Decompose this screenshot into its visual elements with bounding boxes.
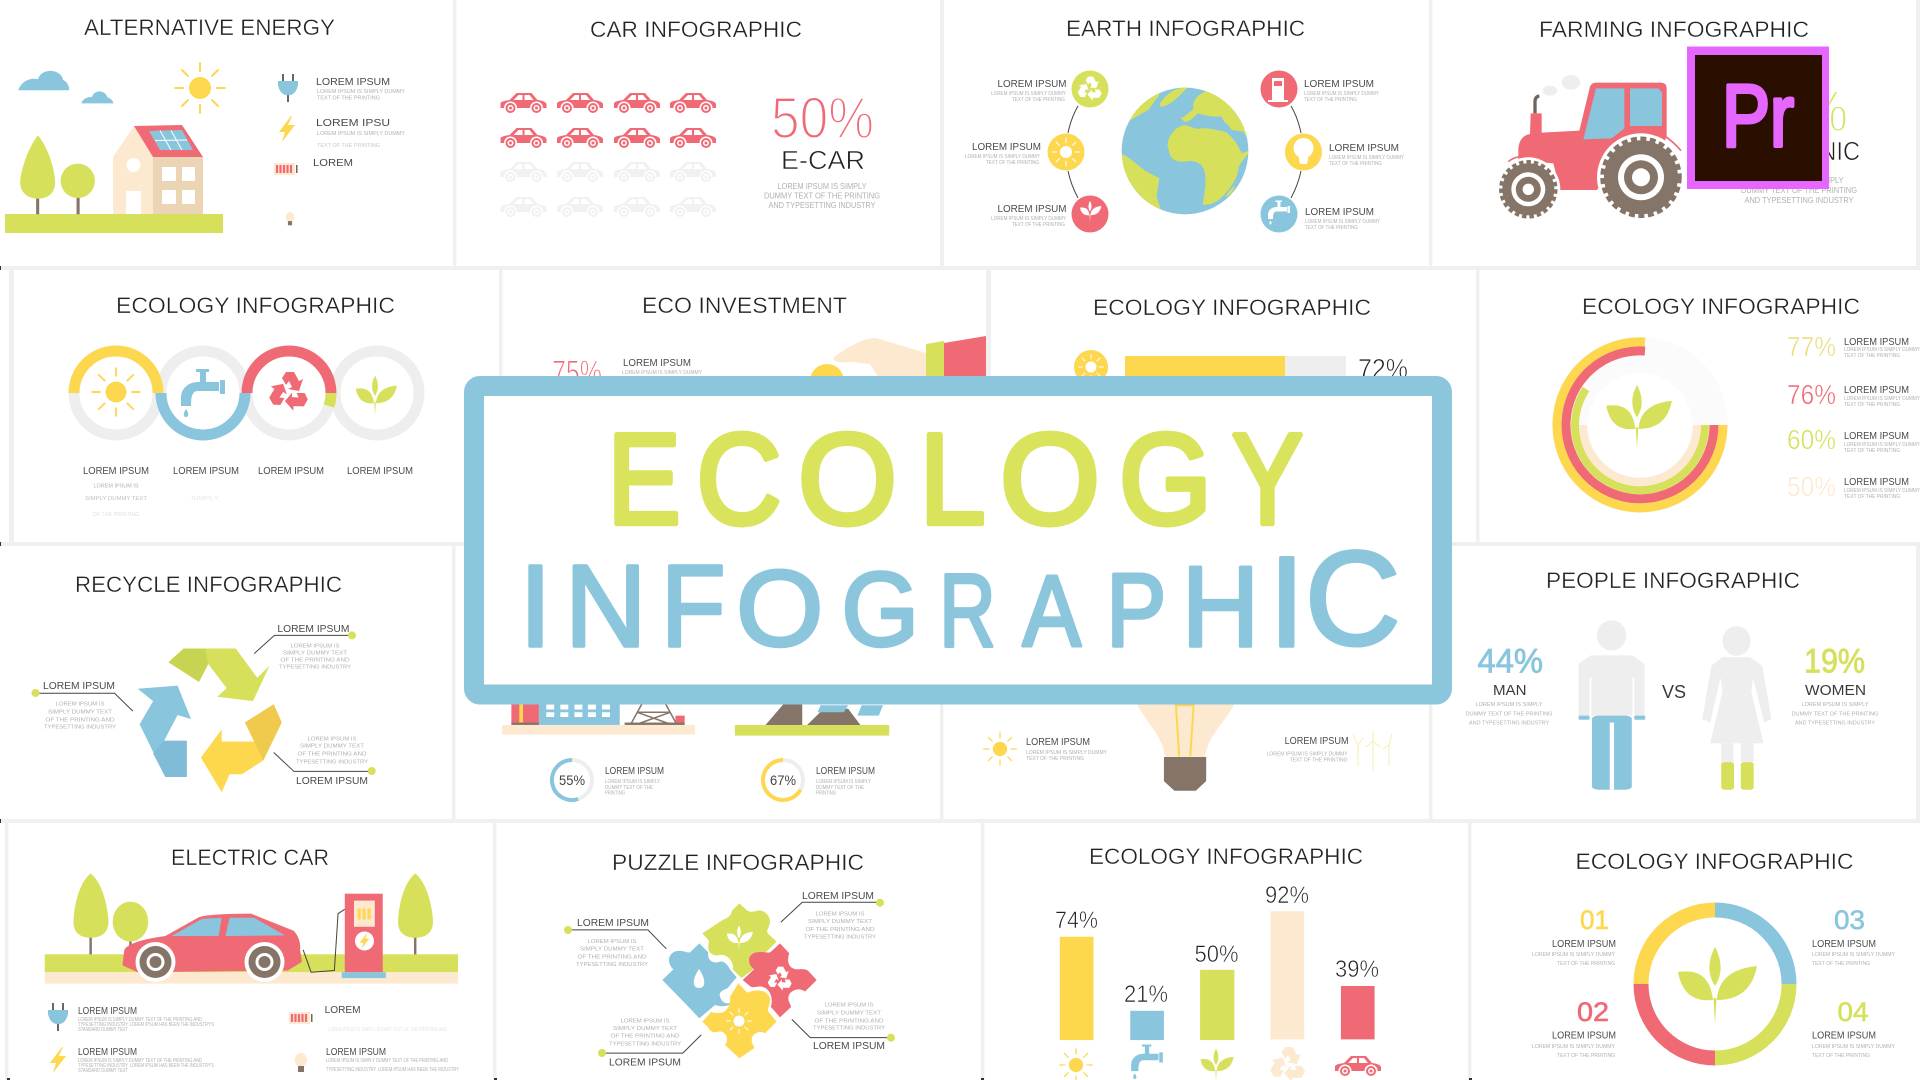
panel: earth infographic — [965, 16, 1404, 232]
callout dots — [564, 899, 895, 1057]
title word: ecology: O — [798, 408, 897, 552]
legend text: LOREM IPSUM IS SIMPLY DUMMY TEXT OF THE PRINTING AND — [78, 1058, 202, 1064]
callout text: OF THE PRINTING AND — [280, 658, 350, 664]
card frame — [474, 386, 1442, 694]
bar values: 50% — [1194, 941, 1238, 968]
text blocks: LOREM IPSUM IS SIMPLY DUMMY — [317, 131, 405, 137]
text: right note: LOREM IPSUM IS SIMPLY DUMMY — [1267, 752, 1348, 758]
stat: women — [1792, 643, 1878, 726]
title: ecology infographic: ECOLOGY INFOGRAPHIC — [116, 293, 395, 318]
legend text: LOREM IPSUM IS SIMPLY DUMMY TEXT OF THE PRINTING AND — [326, 1058, 448, 1064]
text blocks: TEXT OF THE PRINTING — [1304, 97, 1357, 103]
mountain and solar scene — [735, 704, 889, 736]
callout text: SIMPLY DUMMY TEXT — [283, 650, 348, 656]
stat: 50% e-car: LOREM IPSUM IS SIMPLY — [778, 182, 867, 191]
bar values: 92% — [1265, 882, 1309, 909]
callout text: LOREM IPSUM — [813, 1041, 885, 1052]
text: left note: LOREM IPSUM IS SIMPLY DUMMY — [1026, 750, 1107, 756]
callout text: LOREM IPSUM IS — [308, 736, 357, 742]
title word: ecology: G — [1119, 408, 1212, 552]
callout text — [576, 891, 885, 1068]
panel: recycle infographic — [32, 572, 376, 792]
icon: clouds — [18, 71, 113, 103]
legend icons — [48, 1003, 312, 1073]
panel: ecology bar top — [1074, 295, 1408, 384]
badge: premiere pro — [1687, 46, 1829, 189]
item 03: LOREM IPSUM IS SIMPLY DUMMY — [1812, 952, 1895, 958]
ring labels: LOREM IPSUM — [83, 466, 149, 477]
list labels: TEXT OF THE PRINTING — [1844, 448, 1900, 454]
stat: man: DUMMY TEXT OF THE PRINTING — [1466, 712, 1552, 718]
stat: women: 19% — [1804, 643, 1865, 681]
callout text: LOREM IPSUM IS — [56, 702, 105, 708]
title: ecology infographic: ECOLOGY INFOGRAPHIC — [1582, 294, 1860, 319]
title: ecology infographic: ECOLOGY INFOGRAPHIC — [1576, 849, 1854, 874]
ring labels — [83, 466, 413, 518]
item 02: TEXT OF THE PRINTING — [1557, 1053, 1615, 1059]
text blocks: TEXT OF THE PRINTING — [986, 160, 1039, 166]
list labels: LOREM IPSUM — [1844, 431, 1909, 442]
callout text — [43, 624, 368, 787]
callout text: SIMPLY DUMMY TEXT — [48, 710, 113, 716]
item 04: 04 — [1838, 997, 1868, 1027]
tractor — [1496, 75, 1685, 221]
legend text: LOREM IPSUM — [326, 1047, 386, 1058]
stat: 75%: 75% — [552, 354, 602, 392]
title: ecology infographic: ECOLOGY INFOGRAPHIC — [1089, 844, 1363, 869]
title word: infographic: N — [565, 541, 646, 671]
ring labels: SIMPLY DUMMY TEXT — [85, 496, 148, 502]
title word: infographic: O — [736, 548, 823, 668]
stat: man — [1466, 643, 1552, 726]
callout text: LOREM IPSUM — [277, 624, 349, 635]
hand with coin — [810, 336, 986, 398]
title word: infographic: A — [1022, 556, 1082, 668]
stat: 50% e-car: DUMMY TEXT OF THE PRINTING — [764, 192, 880, 200]
callout text: TYPESETTING INDUSTRY — [279, 664, 351, 670]
ring labels: LOREM IPSUM — [173, 466, 239, 477]
callout text: TYPESETTING INDUSTRY — [296, 760, 368, 766]
title: earth infographic: EARTH INFOGRAPHIC — [1066, 16, 1305, 41]
title word: infographic: F — [661, 541, 726, 671]
stat: 50% e-car: 50% — [771, 86, 874, 151]
stat label — [622, 358, 702, 376]
item 01: TEXT OF THE PRINTING — [1557, 961, 1615, 967]
list labels: TEXT OF THE PRINTING — [1844, 494, 1900, 500]
text blocks: LOREM IPSUM IS SIMPLY DUMMY — [1305, 219, 1380, 225]
radial progress chart — [1557, 342, 1723, 508]
bar values — [1055, 882, 1379, 1008]
ring labels: LOREM IPSUM — [347, 466, 413, 477]
legend text: LOREM IPSUM IS SIMPLY DUMMY TEXT OF THE PRINTING AND — [328, 1027, 447, 1033]
item 02: 02 — [1577, 997, 1609, 1027]
house with solar roof — [113, 125, 203, 214]
bar values: 39% — [1335, 956, 1379, 983]
title: electric car: ELECTRIC CAR — [171, 845, 329, 870]
stat: women: LOREM IPSUM IS SIMPLY — [1802, 702, 1869, 708]
icon: sun — [984, 733, 1016, 765]
callout text: LOREM IPSUM IS — [620, 1018, 670, 1024]
item 04 — [1812, 997, 1895, 1059]
text blocks: LOREM IPSUM IS SIMPLY DUMMY — [317, 89, 405, 95]
ring labels: OF THE PRINTING — [92, 512, 140, 518]
text blocks: TEXT OF THE PRINTING — [1012, 97, 1065, 103]
hidden stat behind the badge: LOREM IPSUM IS SIMPLY — [1754, 176, 1844, 185]
callout dots — [32, 631, 376, 775]
percent list: 50% — [1787, 471, 1836, 502]
item 03: TEXT OF THE PRINTING — [1812, 961, 1870, 967]
gauge: 55%: LOREM IPSUM — [605, 766, 664, 777]
title: car infographic: CAR INFOGRAPHIC — [590, 17, 802, 42]
badge: premiere pro: Pr — [1722, 66, 1794, 165]
title word: infographic: I — [519, 541, 552, 671]
callout leader lines — [568, 902, 891, 1053]
item 02: LOREM IPSUM — [1552, 1030, 1616, 1042]
item 04: TEXT OF THE PRINTING — [1812, 1053, 1870, 1059]
stat: 50% e-car: E-CAR — [781, 145, 865, 175]
callout text: OF THE PRINTING AND — [298, 752, 367, 758]
text blocks: LOREM IPSUM — [1305, 207, 1374, 218]
title word: ecology: Y — [1232, 408, 1303, 552]
callout text: SIMPLY DUMMY TEXT — [580, 946, 645, 952]
panel: people infographic — [1466, 568, 1878, 790]
bar icons — [1060, 1044, 1381, 1080]
icon: sun — [175, 63, 225, 113]
hidden stat behind the badge: AND TYPESETTING INDUSTRY — [1744, 196, 1854, 205]
item 01 — [1532, 905, 1616, 967]
ring icons — [92, 368, 397, 417]
callout text: OF THE PRINTING AND — [610, 1034, 680, 1040]
callout text: LOREM IPSUM IS — [824, 1002, 874, 1008]
text blocks: TEXT OF THE PRINTING — [317, 143, 380, 149]
gauge: 67%: LOREM IPSUM — [816, 766, 875, 777]
stat: man: AND TYPESETTING INDUSTRY — [1469, 720, 1549, 726]
gauge: 67% — [763, 760, 875, 800]
text blocks: TEXT OF THE PRINTING — [1329, 161, 1382, 167]
puzzle pieces — [662, 903, 817, 1058]
gauge: 67%: DUMMY TEXT OF THE — [816, 785, 864, 791]
legend text: LOREM IPSUM — [78, 1006, 137, 1017]
recycle arrows — [138, 648, 282, 792]
legend text: LOREM IPSUM IS SIMPLY DUMMY TEXT OF THE PRINTING AND — [78, 1017, 202, 1023]
text: left note — [1026, 737, 1107, 762]
stat: man: 44% — [1478, 643, 1543, 681]
callout text: SIMPLY DUMMY TEXT — [808, 919, 873, 925]
text blocks: TEXT OF THE PRINTING — [317, 96, 380, 102]
pump dial — [355, 932, 374, 950]
icon: leaf — [1678, 947, 1757, 1024]
percent list: 76% — [1787, 379, 1836, 410]
linked progress rings — [74, 351, 419, 435]
item 02: LOREM IPSUM IS SIMPLY DUMMY — [1532, 1044, 1615, 1050]
legend text: LOREM IPSUM — [78, 1047, 137, 1058]
factory scene — [502, 702, 695, 735]
legend text: STANDARD DUMMY TEXT — [78, 1027, 128, 1033]
stat label: LOREM IPSUM IS SIMPLY DUMMY — [622, 370, 702, 376]
percent list — [1787, 331, 1836, 502]
stat: women: DUMMY TEXT OF THE PRINTING — [1792, 712, 1878, 718]
panel: light bulb — [984, 700, 1392, 791]
text blocks: LOREM IPSUM — [998, 204, 1066, 215]
item 01: 01 — [1580, 905, 1609, 935]
callout text: TYPESETTING INDUSTRY — [609, 1042, 681, 1048]
text blocks: TEXT OF THE PRINTING — [1012, 222, 1065, 228]
gauge: 67%: 67% — [770, 772, 796, 788]
text blocks: LOREM IPSUM IS SIMPLY DUMMY — [965, 154, 1040, 160]
edge ticks — [0, 266, 1472, 1080]
hidden stat behind the badge: DUMMY TEXT OF THE PRINTING — [1741, 186, 1857, 195]
panel: ecology rings — [1557, 294, 1920, 508]
legend text: STANDARD DUMMY TEXT — [78, 1068, 128, 1074]
gauge: 55%: LOREM IPSUM IS SIMPLY — [605, 779, 660, 785]
callout text: OF THE PRINTING AND — [46, 718, 115, 724]
title: ecology infographic: ECOLOGY INFOGRAPHIC — [1093, 295, 1371, 320]
list labels: LOREM IPSUM — [1844, 337, 1909, 348]
panel: farming infographic — [1496, 17, 1860, 221]
title word: infographic: R — [939, 553, 996, 669]
callout text: SIMPLY DUMMY TEXT — [817, 1010, 882, 1016]
item 02 — [1532, 997, 1616, 1059]
callout text: LOREM IPSUM IS — [588, 939, 637, 945]
title word: infographic: H — [1182, 544, 1259, 671]
icon: leaf — [1606, 385, 1672, 449]
gauge: 55%: DUMMY TEXT OF THE — [605, 785, 653, 791]
title word: ecology: O — [1000, 408, 1100, 552]
light bulb — [1136, 700, 1236, 791]
text: right note: TEXT OF THE PRINTING — [1290, 758, 1348, 764]
text: right note: LOREM IPSUM — [1285, 736, 1349, 747]
text: left note: LOREM IPSUM — [1026, 737, 1090, 748]
title: puzzle infographic: PUZZLE INFOGRAPHIC — [612, 850, 864, 875]
callout text: LOREM IPSUM — [296, 776, 368, 787]
title word: infographic: P — [1106, 553, 1166, 669]
trees — [20, 135, 95, 214]
panel: alternative energy — [5, 15, 405, 233]
ring labels: SIMPLY — [191, 496, 219, 502]
stat: man: LOREM IPSUM IS SIMPLY — [1476, 702, 1543, 708]
text: right note — [1267, 736, 1349, 764]
title: farming infographic: FARMING INFOGRAPHIC — [1539, 17, 1809, 42]
icon circles — [1048, 70, 1322, 232]
bar chart — [1060, 911, 1375, 1040]
hidden stat behind the badge: 50% — [1745, 79, 1848, 144]
item 03 — [1812, 905, 1895, 967]
label: vs: VS — [1662, 682, 1686, 702]
text blocks: LOREM IPSU — [316, 118, 390, 129]
item 03: LOREM IPSUM — [1812, 939, 1876, 950]
globe — [1120, 87, 1250, 215]
title word: ecology: C — [696, 408, 782, 552]
panel: electric car — [45, 845, 459, 1074]
stat: 50% e-car: AND TYPESETTING INDUSTRY — [768, 201, 876, 210]
list labels: LOREM IPSUM — [1844, 477, 1909, 488]
stat: 50% e-car — [764, 86, 880, 210]
text blocks: LOREM IPSUM IS SIMPLY DUMMY — [1329, 155, 1404, 161]
callout text: TYPESETTING INDUSTRY — [576, 962, 648, 968]
connector arcs — [1068, 106, 1301, 198]
icon: sun badge — [1074, 350, 1108, 384]
callout text: TYPESETTING INDUSTRY — [44, 724, 116, 730]
list labels: TEXT OF THE PRINTING — [1844, 353, 1900, 359]
gauge: 55% — [552, 760, 664, 800]
pictogram of cars — [500, 93, 716, 218]
panel: eco investment — [552, 293, 986, 398]
hidden stat behind the badge — [1741, 79, 1860, 205]
gauge: 55%: PRINTING — [605, 790, 625, 796]
text blocks: LOREM IPSUM IS SIMPLY DUMMY — [991, 91, 1066, 97]
gauge: 67%: LOREM IPSUM IS SIMPLY — [816, 779, 871, 785]
stat: man: MAN — [1493, 682, 1526, 699]
callout text: SIMPLY DUMMY TEXT — [613, 1026, 678, 1032]
item 04: LOREM IPSUM IS SIMPLY DUMMY — [1812, 1044, 1895, 1050]
title word: ecology: L — [920, 408, 986, 552]
title: recycle infographic: RECYCLE INFOGRAPHIC — [75, 572, 342, 597]
figure: woman — [1702, 626, 1771, 790]
callout text: LOREM IPSUM — [609, 1058, 681, 1068]
donut chart — [1641, 910, 1789, 1058]
text blocks — [965, 79, 1404, 231]
text blocks: LOREM IPSUM — [316, 77, 390, 88]
callout text: OF THE PRINTING AND — [814, 1018, 884, 1024]
puzzle icons — [694, 925, 793, 1034]
title: people infographic: PEOPLE INFOGRAPHIC — [1546, 568, 1800, 593]
text blocks: LOREM IPSUM — [1304, 79, 1374, 90]
text blocks: LOREM — [313, 158, 353, 169]
callout text: LOREM IPSUM IS — [290, 644, 340, 650]
title word: infographic: G — [842, 552, 919, 668]
percent list: 60% — [1787, 424, 1836, 455]
panel: puzzle infographic — [564, 850, 895, 1068]
road scene — [45, 873, 458, 984]
callout text: TYPESETTING INDUSTRY — [804, 934, 876, 940]
panel: car infographic — [500, 17, 880, 218]
callout leader lines — [37, 635, 371, 771]
title word: infographic: C — [1305, 524, 1400, 674]
progress bar 72%: 72% — [1358, 353, 1408, 384]
callout text: OF THE PRINTING AND — [806, 927, 875, 933]
callout text: SIMPLY DUMMY TEXT — [300, 744, 365, 750]
text blocks: LOREM IPSUM IS SIMPLY DUMMY — [1304, 91, 1379, 97]
item 04: LOREM IPSUM — [1812, 1030, 1876, 1042]
electric car — [122, 914, 302, 982]
callout text: LOREM IPSUM IS — [816, 912, 865, 918]
callout text: LOREM IPSUM — [577, 918, 649, 929]
legend text: TYPESETTING INDUSTRY. LOREM IPSUM HAS BEEN THE INDUSTRY'S — [78, 1063, 214, 1069]
hidden stat behind the badge: ORGANIC — [1750, 136, 1860, 166]
bar values: 21% — [1124, 981, 1168, 1008]
panel: energy scene with gauges — [502, 702, 889, 800]
main title card — [474, 386, 1442, 694]
title word: infographic: I — [1269, 531, 1305, 674]
callout text: TYPESETTING INDUSTRY — [813, 1026, 885, 1032]
panel: ecology donut — [1532, 849, 1895, 1059]
icon: wind turbines — [1353, 731, 1392, 771]
legend text — [78, 1005, 459, 1074]
progress bar 72% — [1125, 353, 1408, 384]
text blocks: LOREM IPSUM — [998, 79, 1066, 90]
item 03: 03 — [1834, 905, 1865, 935]
legend text: LOREM — [325, 1005, 361, 1016]
text: left note: TEXT OF THE PRINTING — [1026, 756, 1084, 762]
ring labels: LOREM IPSUM — [258, 466, 324, 477]
percent list: 77% — [1787, 331, 1836, 362]
gauge: 55%: 55% — [559, 772, 585, 788]
callout text: OF THE PRINTING AND — [578, 954, 647, 960]
text blocks: LOREM IPSUM IS SIMPLY DUMMY — [991, 216, 1066, 222]
list labels: TEXT OF THE PRINTING — [1844, 402, 1900, 408]
stat: women: WOMEN — [1805, 682, 1866, 699]
legend text: TYPESETTING INDUSTRY. LOREM IPSUM HAS BEEN THE INDUSTRY — [326, 1067, 459, 1073]
text blocks: TEXT OF THE PRINTING — [1305, 225, 1358, 231]
icons: plug, bolt, battery, bulb — [274, 74, 298, 225]
text blocks: LOREM IPSUM — [972, 142, 1041, 153]
ring labels: LOREM IPSUM IS — [94, 484, 139, 490]
list labels: LOREM IPSUM — [1844, 385, 1909, 396]
bar values: 74% — [1055, 907, 1098, 934]
gauge: 67%: PRINTING — [816, 790, 836, 796]
panel: ecology circles — [74, 293, 419, 518]
stat: women: AND TYPESETTING INDUSTRY — [1795, 720, 1875, 726]
callout text: LOREM IPSUM — [802, 891, 874, 902]
item 01: LOREM IPSUM — [1552, 939, 1616, 950]
text blocks: LOREM IPSUM — [1329, 143, 1399, 154]
text blocks — [313, 77, 405, 169]
callout text: LOREM IPSUM — [43, 681, 115, 692]
item 01: LOREM IPSUM IS SIMPLY DUMMY — [1532, 952, 1615, 958]
title word: ecology: E — [608, 408, 681, 552]
title: alternative energy: ALTERNATIVE ENERGY — [84, 15, 335, 40]
figure: man — [1579, 620, 1645, 790]
list labels — [1844, 337, 1920, 500]
ground — [5, 214, 223, 233]
title: eco investment: ECO INVESTMENT — [642, 293, 847, 318]
legend text: TYPESETTING INDUSTRY. LOREM IPSUM HAS BEEN THE INDUSTRY'S — [78, 1022, 214, 1028]
stat label: LOREM IPSUM — [623, 358, 691, 369]
panel: ecology bar chart — [1055, 844, 1381, 1080]
